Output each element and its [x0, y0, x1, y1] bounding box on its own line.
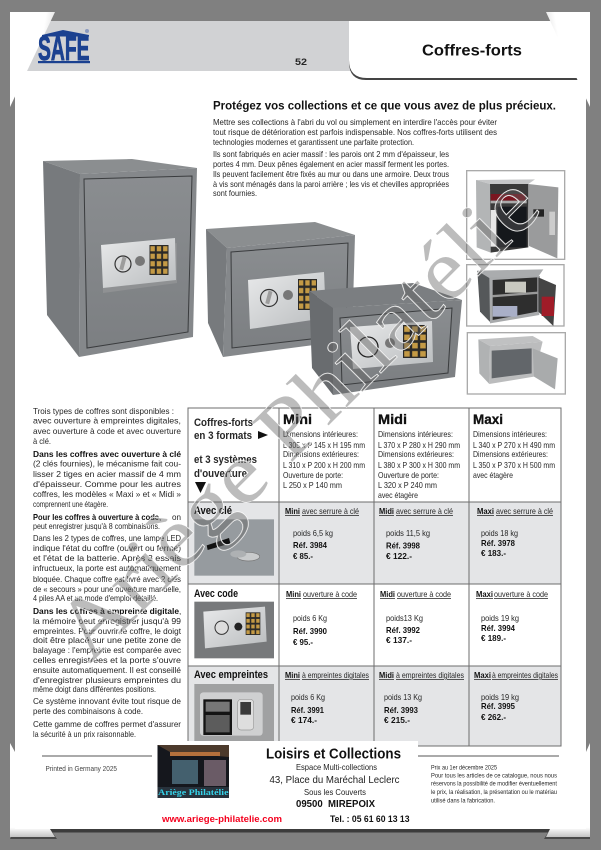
column: Maxi specs: avec étagère	[473, 471, 513, 480]
row: fingerprint lock: poids 19 kg	[481, 693, 519, 702]
photo: key	[194, 519, 274, 576]
column: Maxi specs: Maxi	[473, 412, 503, 427]
column: Midi specs: L 320 x P 240 mm	[378, 481, 437, 490]
row: code lock: € 137.-	[386, 636, 412, 645]
column: Maxi specs	[473, 412, 555, 480]
intro text: tout risque de détérioration est parfois indispensable. Nos coffres-forts utilisent des	[213, 128, 497, 137]
row: code lock: poids 19 kg	[481, 614, 519, 623]
column: Maxi specs: L 350 x P 370 x H 500 mm	[473, 461, 555, 470]
left column text: Trois types de coffres sont disponibles :	[33, 407, 174, 416]
intro text: sont fournies.	[213, 189, 257, 198]
column: Midi specs: L 370 x P 280 x H 290 mm	[378, 441, 460, 450]
row: key lock: Maxi	[477, 507, 494, 516]
table intro cell: et 3 systèmes	[194, 454, 257, 466]
left column text: comprennent une étagère.	[33, 500, 108, 509]
thumbnail: safe with albums	[467, 171, 565, 259]
left column text: ensuite automatiquement. Il est conseillé	[33, 666, 181, 675]
title tab	[349, 21, 586, 80]
photo: fingerprint panel	[194, 684, 274, 742]
dealer block: Tel. : 05 61 60 13 13	[330, 814, 410, 825]
table intro cell: Coffres-forts	[194, 417, 253, 429]
main heading: Protégez vos collections et ce que vous avez de plus précieux.	[213, 98, 556, 112]
row: fingerprint lock: Avec empreintes	[194, 669, 268, 681]
row: code lock: Midi	[380, 590, 395, 599]
dealer block: Espace Multi-collections	[296, 762, 377, 772]
photo: small safe	[309, 283, 462, 395]
corner flap top right	[546, 12, 590, 107]
dealer block: Loisirs et Collections	[266, 746, 401, 762]
column: Mini specs: Dimensions extérieures:	[283, 450, 359, 459]
row: key lock: Réf. 3998	[386, 542, 420, 550]
left column text: bloquée. Chaque coffre est livré avec 2 clés	[33, 575, 181, 584]
left column text: infructueux, la porte est automatiquement	[33, 564, 182, 573]
column: Midi specs: Dimensions intérieures:	[378, 430, 453, 439]
logo: SAFE	[38, 29, 90, 68]
corner flap bottom right	[544, 743, 590, 839]
row: key lock: poids 11,5 kg	[386, 529, 430, 538]
left column text: balayage : l'empreinte est comparée avec	[33, 646, 181, 655]
intro text: Mettre ses collections à l'abri du vol ou simplement en interdire l'accès pour éviter	[213, 118, 497, 127]
row: fingerprint lock: à empreintes digitales	[396, 671, 464, 680]
row: code lock: Réf. 3992	[386, 626, 420, 635]
table intro cell: d'ouverture	[194, 468, 247, 480]
row: code lock: Avec code	[194, 588, 238, 600]
left column text: d'enregistrer plusieurs empreintes du	[33, 676, 181, 685]
photo: code panel	[194, 602, 274, 658]
row: key lock: avec serrure à clé	[496, 507, 553, 516]
column: Midi specs: Dimensions extérieures:	[378, 450, 454, 459]
comparison table	[188, 408, 561, 746]
column: Midi specs: avec étagère	[378, 491, 418, 500]
left column text: 4 piles AA et un mode d'emploi détaillé.	[33, 594, 158, 603]
thumbnail: empty safe	[467, 333, 565, 394]
row: fingerprint lock: poids 6 Kg	[291, 693, 325, 702]
dealer block: 43, Place du Maréchal Leclerc	[270, 774, 400, 786]
intro text: à vis sont ménagés dans la paroi arrière ; les vis et chevilles appropriées	[213, 180, 449, 189]
row: fingerprint lock: Réf. 3993	[384, 706, 418, 715]
left column text: Cette gamme de coffres permet d'assurer	[33, 720, 181, 729]
row: key lock: Midi	[379, 507, 394, 516]
column: Maxi specs: L 340 x P 270 x H 490 mm	[473, 441, 555, 450]
left column text: Pour les coffres à ouverture à code	[33, 513, 159, 522]
intro text: Ils sont fabriqués en acier massif : les parois ont 2 mm d'épaisseur, les	[213, 150, 449, 159]
left column text: même doigt dans différentes positions.	[33, 685, 156, 694]
row: fingerprint lock: Réf. 3991	[291, 706, 324, 715]
left column text: peut enregistrer jusqu'à 8 combinaisons.	[33, 522, 160, 531]
photo: large safe	[43, 159, 197, 357]
header band	[15, 21, 355, 71]
left column text: (2 clés fournies), le mécanisme fait cou-	[33, 460, 181, 468]
row: code lock: ouverture à code	[397, 590, 451, 599]
row: fingerprint lock: Réf. 3995	[481, 702, 515, 711]
row: code lock: Mini	[286, 590, 301, 599]
dealer block	[157, 741, 418, 825]
row: fingerprint lock: € 174.-	[291, 716, 317, 725]
price note: réservons la possibilité de modifier éventuellement	[431, 780, 557, 788]
row: fingerprint lock: Maxi	[474, 671, 491, 680]
row: code lock: € 189.-	[481, 634, 506, 643]
left column text: la mémoire peut enregistrer jusqu'à 99	[33, 617, 181, 626]
dealer block: Sous les Couverts	[304, 787, 366, 797]
row: key lock	[194, 505, 553, 576]
title tab: Coffres-forts	[422, 42, 522, 60]
price note: utilisé dans la fabrication.	[431, 798, 495, 804]
row: fingerprint lock: poids 13 Kg	[384, 693, 422, 702]
thumbnail: safe with shelf	[467, 265, 564, 326]
corner flap bottom left	[10, 743, 57, 839]
left column text: ,	[179, 607, 181, 616]
photo: shop	[158, 745, 229, 798]
left column text: de « secours » pour une ouverture manuelle,	[33, 585, 181, 594]
column: Mini specs: Mini	[283, 412, 312, 427]
intro text: portes 4 mm. Deux pênes également en acier massif ferment les portes.	[213, 160, 449, 169]
left column text: avec ouverture à empreintes digitales,	[33, 416, 181, 426]
watermark: Ariège Philatélie	[36, 156, 557, 677]
row: code lock: Réf. 3990	[293, 627, 327, 636]
row: key lock: Réf. 3978	[481, 539, 515, 548]
price note: le prix, la réalisation, la présentation ou le matériau	[431, 789, 557, 796]
row: code lock	[194, 588, 548, 658]
intro text: Ils peuvent facilement être fixés au mur ou dans une armoire. Deux trous	[213, 170, 449, 179]
row: key lock: avec serrure à clé	[396, 507, 453, 516]
left column text: celles enregistrées et la porte s'ouvre	[33, 656, 181, 665]
table intro cell	[194, 417, 268, 493]
row: key lock: Avec clé	[194, 505, 232, 517]
row: code lock: poids13 Kg	[386, 614, 423, 623]
left column text: indique l'état du coffre (ouvert ou fermé)	[33, 544, 181, 553]
column: Midi specs: Ouverture de porte:	[378, 471, 439, 480]
price note	[431, 764, 558, 804]
left column text: lisser 2 tiges en acier massif de 4 mm	[33, 470, 181, 479]
intro text	[213, 118, 497, 198]
column: Maxi specs: Dimensions extérieures:	[473, 450, 548, 459]
price note: Pour tous les articles de ce catalogue, nous nous	[431, 772, 558, 780]
column: Midi specs	[378, 412, 460, 500]
row: code lock: € 95.-	[293, 638, 313, 647]
left column text: Dans les coffres avec ouverture à clé	[33, 450, 181, 459]
row: code lock: Réf. 3994	[481, 624, 515, 633]
left column text: perte des combinaisons à code.	[33, 707, 143, 716]
column: Midi specs: L 380 x P 300 x H 300 mm	[378, 461, 460, 470]
row: fingerprint lock	[194, 669, 558, 742]
printed note: Printed in Germany 2025	[46, 764, 117, 773]
row: code lock: Maxi	[476, 590, 493, 599]
page number: 52	[295, 57, 307, 68]
column: Midi specs: Midi	[378, 412, 407, 427]
row: key lock: poids 6,5 kg	[293, 529, 333, 538]
row: fingerprint lock: € 262.-	[481, 713, 506, 722]
column: Mini specs: Ouverture de porte:	[283, 471, 343, 480]
left column text: la sécurité à un prix raisonnable.	[33, 730, 136, 739]
corner flap top left	[10, 12, 55, 107]
left column text: empreintes. Pour ouvrir le coffre, le doigt	[33, 627, 182, 636]
column: Maxi specs: Dimensions intérieures:	[473, 430, 547, 439]
left column text	[33, 407, 182, 739]
column: Mini specs	[283, 412, 365, 490]
left column text: coffres, les modèles « Maxi » et « Midi »	[33, 490, 181, 499]
row: code lock: ouverture à code	[494, 590, 548, 599]
row: fingerprint lock: Midi	[379, 671, 394, 680]
dealer block: 09500 MIREPOIX	[296, 799, 375, 810]
row: key lock: avec serrure à clé	[302, 507, 359, 516]
row: key lock: Réf. 3984	[293, 541, 327, 550]
row: key lock: Mini	[285, 507, 300, 516]
intro text: technologies modernes et garantissent une parfaite protection.	[213, 138, 414, 147]
column: Mini specs: L 305 x P 145 x H 195 mm	[283, 441, 365, 450]
row: code lock: ouverture à code	[303, 590, 357, 599]
photo: medium safe	[206, 222, 355, 357]
logo: SAFE: SAFE	[38, 30, 90, 68]
table intro cell: en 3 formats	[194, 430, 252, 442]
left column text: Dans les coffres à empreinte digitale	[33, 607, 179, 616]
row: key lock: € 122.-	[386, 552, 412, 561]
dealer block: www.ariege-philatelie.com	[161, 814, 282, 825]
left column text: et l'état de la batterie. Après 3 essais	[33, 554, 181, 563]
row: fingerprint lock: à empreintes digitales	[302, 671, 369, 680]
photo: shop: Ariège Philatélie	[158, 787, 229, 797]
left column text: d'épaisseur. Comme pour les autres	[33, 480, 181, 489]
left column text: on	[172, 513, 181, 522]
row: fingerprint lock: à empreintes digitales	[492, 671, 558, 680]
column: Mini specs: L 310 x P 200 x H 200 mm	[283, 461, 365, 470]
row: fingerprint lock: € 215.-	[384, 716, 410, 725]
left column text: à clé.	[33, 437, 51, 446]
column: Mini specs: Dimensions intérieures:	[283, 430, 358, 439]
row: key lock: poids 18 kg	[481, 529, 518, 538]
row: fingerprint lock: Mini	[285, 671, 300, 680]
left column text: Dans les 2 types de coffres, une lampe LED	[33, 534, 181, 543]
left column text: ,	[159, 513, 161, 522]
column: Mini specs: L 250 x P 140 mm	[283, 481, 342, 490]
row: code lock: poids 6 Kg	[293, 614, 327, 623]
left column text: Ce système innovant évite tout risque de	[33, 697, 181, 706]
row: key lock: € 183.-	[481, 549, 506, 558]
left column text: avec ouverture à code et avec ouverture	[33, 427, 181, 436]
left column text: doit être placé sur une petite zone de	[33, 636, 181, 645]
row: key lock: € 85.-	[293, 552, 313, 561]
price note: Prix au 1er décembre 2025	[431, 764, 497, 772]
footer rules	[42, 755, 559, 757]
